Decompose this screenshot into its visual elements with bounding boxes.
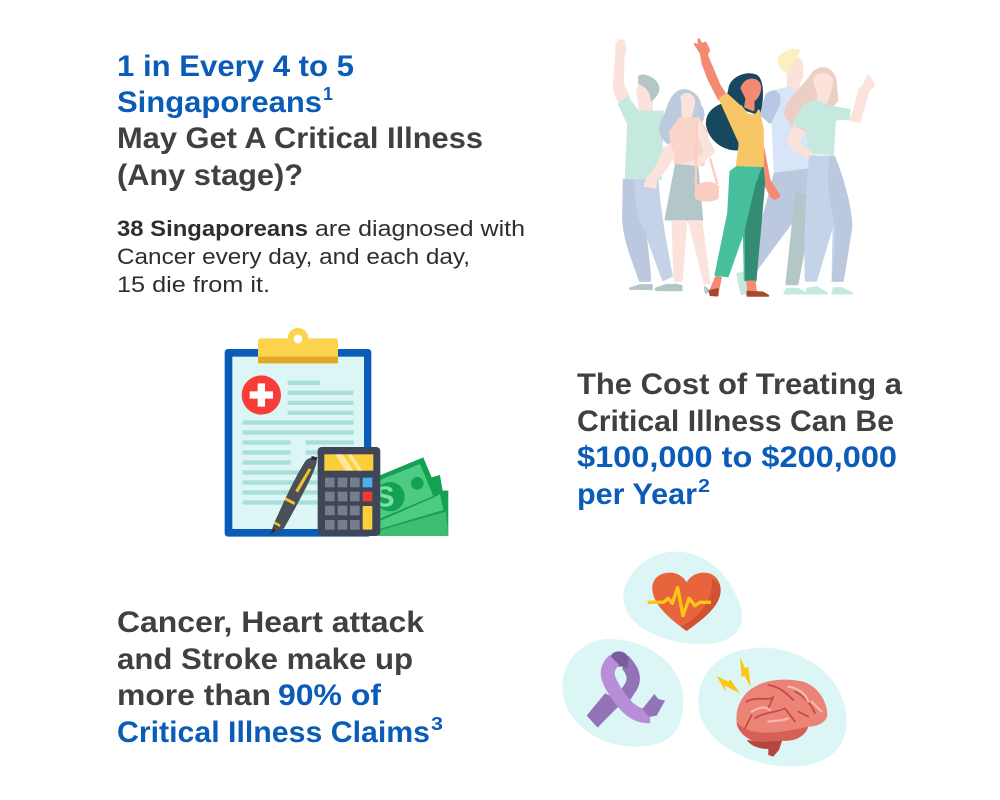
text block: daily cancer diagnoses: [117, 216, 525, 297]
figure: man on the left: [614, 40, 681, 290]
figure: woman in the foreground: [695, 39, 779, 296]
heading: 1 in every 4 to 5 Singaporeans: [117, 50, 483, 192]
heading: cost of treating a critical illness: Critical Illness Can Be: [577, 405, 894, 438]
figure: woman on the right: [785, 68, 874, 293]
heading: cost of treating a critical illness: The Cost of Treating a: [577, 368, 903, 401]
icon: cash notes: [375, 457, 448, 536]
figure: man in blue shirt: [737, 50, 813, 294]
clipboard clip: [258, 328, 338, 363]
text block: daily cancer diagnoses: 38 Singaporeans: [117, 216, 308, 241]
illustration: medical clipboard with calculator and cash: [225, 328, 448, 537]
form lines: [243, 381, 354, 505]
heading: 1 in every 4 to 5 Singaporeans: 1: [323, 84, 333, 104]
heading: 1 in every 4 to 5 Singaporeans: (Any stage)?: [117, 159, 303, 192]
heading: share of critical illness claims: more than: [117, 679, 271, 712]
heading: 1 in every 4 to 5 Singaporeans: 1 in Every 4 to 5: [117, 50, 354, 83]
heading: share of critical illness claims: 90% of: [278, 679, 381, 712]
text block: daily cancer diagnoses: are diagnosed with: [315, 216, 525, 241]
heading: share of critical illness claims: Cancer, Heart attack: [117, 606, 425, 639]
heading: cost of treating a critical illness: $100,000 to $200,000: [577, 441, 897, 474]
text block: daily cancer diagnoses: Cancer every day, and each day,: [117, 244, 470, 269]
heading: cost of treating a critical illness: 2: [698, 476, 710, 496]
heading: share of critical illness claims: 3: [431, 714, 443, 734]
icon: calculator: [318, 447, 380, 536]
icon: pen: [270, 456, 317, 535]
illustration: group of people waving: [614, 39, 874, 296]
text block: daily cancer diagnoses: 15 die from it.: [117, 272, 270, 297]
heading: share of critical illness claims: and Stroke make up: [117, 643, 413, 676]
heading: share of critical illness claims: [117, 606, 443, 749]
illustration: critical illness icons: [562, 552, 847, 767]
heading: cost of treating a critical illness: [577, 368, 903, 511]
icon: heart with pulse line: [623, 552, 742, 644]
icon: brain with lightning bolts: [698, 648, 847, 767]
heading: 1 in every 4 to 5 Singaporeans: May Get A Critical Illness: [117, 122, 483, 155]
clipboard board: [225, 349, 371, 537]
icon: cash notes: S: [375, 482, 394, 514]
icon: red medical cross: [242, 375, 281, 415]
heading: 1 in every 4 to 5 Singaporeans: Singaporeans: [117, 86, 322, 119]
heading: share of critical illness claims: Critical Illness Claims: [117, 716, 430, 749]
icon: purple awareness ribbon: [562, 639, 683, 747]
figure: woman with handbag: [652, 90, 718, 293]
heading: cost of treating a critical illness: per Year: [577, 478, 698, 511]
